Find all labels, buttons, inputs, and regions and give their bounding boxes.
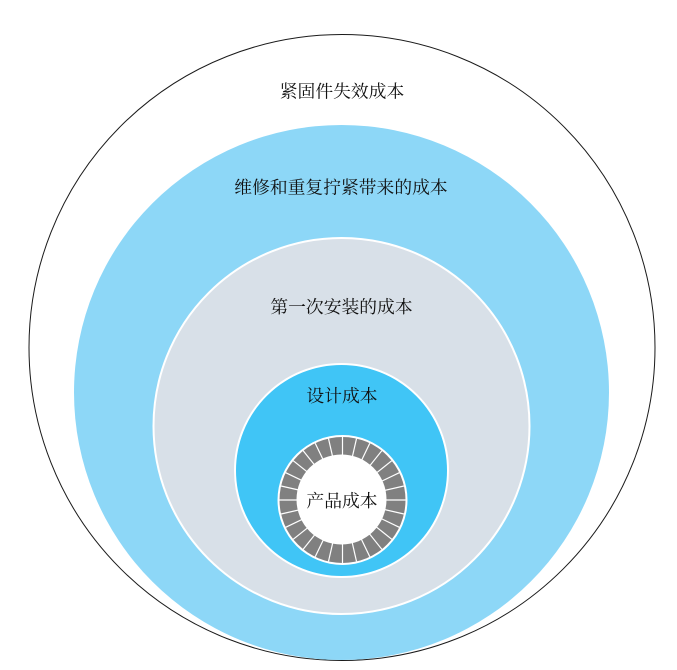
heading: repair and retightening cost: 维修和重复拧紧带来的成本 [234, 178, 448, 198]
heading: design cost: 设计成本 [306, 386, 378, 406]
circle: design cost [235, 364, 448, 577]
circle: repair and retightening cost [74, 125, 609, 660]
heading: initial installation cost: 第一次安装的成本 [270, 297, 413, 317]
icon: fastener ring [278, 435, 408, 565]
heading: fastener failure cost: 紧固件失效成本 [280, 82, 404, 102]
heading: product cost: 产品成本 [306, 491, 378, 511]
circle: initial installation cost [154, 238, 530, 614]
